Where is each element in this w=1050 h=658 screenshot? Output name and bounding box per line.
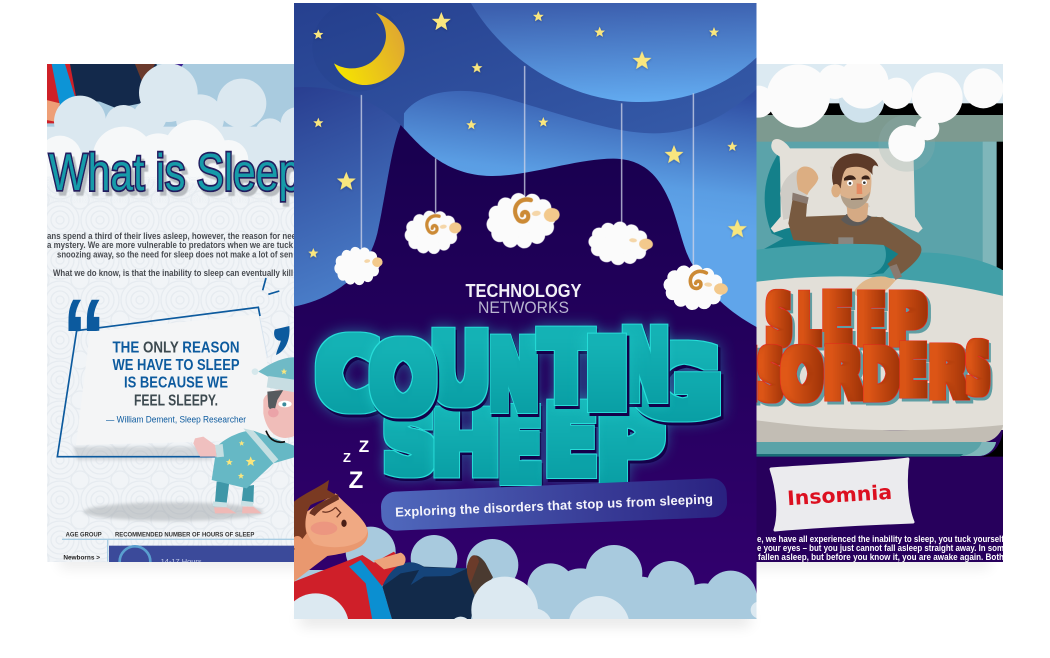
title: Counting: I — [583, 320, 631, 430]
sleep hours table fragment: 14-17 Hours — [161, 558, 202, 565]
intro text: ans spend a third of their lives asleep, however, the reason for nee — [47, 231, 296, 242]
moon — [312, 2, 405, 92]
title: Sleep Disorders: R — [928, 335, 968, 413]
title: Sheep — [383, 386, 664, 503]
subtitle pill: Exploring the disorders that stop us from sleeping — [395, 491, 713, 520]
intro text: a mystery. We are more vulnerable to predators when we are tuck — [47, 240, 294, 251]
cloud band and thought bubble — [756, 64, 1003, 172]
title: Sleep Disorders — [756, 288, 992, 406]
logo: Technology Networks — [466, 281, 582, 317]
bed base — [750, 419, 1004, 457]
quote card — [57, 278, 290, 460]
intro text: snoozing away, so the need for sleep does not make a lot of sen — [57, 250, 293, 260]
title: Counting: N — [620, 311, 670, 421]
title: Counting — [316, 311, 722, 438]
pillow label — [771, 459, 913, 530]
insomnia body text: e your eyes – but you just cannot fall asleep straight away. In som — [757, 543, 1004, 554]
title: Sleep Disorders: E — [856, 283, 886, 360]
arm and hand on blanket — [854, 216, 922, 296]
title: Counting: U — [429, 315, 491, 424]
hanging sheep — [332, 66, 730, 314]
clouds and sleeping man cropped at top of left page — [47, 64, 294, 196]
night sky background — [294, 3, 759, 620]
title: Counting: O — [369, 324, 437, 434]
title: Sheep: E — [544, 386, 598, 496]
panel: Counting Sheep cover (centre page) — [282, 2, 767, 658]
quote text: FEEL SLEEPY. — [134, 393, 218, 410]
sleep hours table fragment — [62, 532, 294, 562]
sleep hours table fragment: RECOMMENDED NUMBER OF HOURS OF SLEEP — [115, 533, 254, 539]
back clouds — [294, 527, 757, 637]
subtitle pill — [380, 478, 728, 531]
title: Sleep Disorders: S — [765, 280, 793, 359]
intro text — [47, 231, 296, 279]
man in bed — [788, 153, 884, 245]
blanket — [750, 244, 1002, 300]
title: Sleep Disorders: I — [741, 335, 759, 414]
insomnia body text — [757, 534, 1005, 563]
stars — [308, 11, 747, 258]
title: Sleep Disorders: E — [821, 279, 853, 358]
insomnia body text: fallen asleep, but before you know it, you are awake again. Both — [758, 552, 1004, 563]
panel shadows — [60, 552, 990, 626]
title: Sleep Disorders: S — [757, 335, 785, 414]
title: Counting: C — [316, 321, 380, 430]
title: Counting: T — [540, 314, 593, 423]
quote text: WE HAVE TO SLEEP — [112, 357, 240, 374]
title: Sheep: P — [596, 391, 664, 500]
title: What is Sleep?: What is Sleep? — [49, 144, 324, 202]
zzz — [343, 437, 369, 494]
zzz: Z — [343, 450, 351, 465]
title: Sleep Disorders: S — [965, 329, 991, 408]
quote text: IS BECAUSE WE — [124, 375, 228, 392]
title: Sheep: H — [431, 394, 501, 493]
title: Sheep: E — [498, 390, 542, 503]
sleeping man — [291, 480, 493, 620]
title: Counting: N — [488, 320, 540, 431]
pillow — [771, 139, 923, 233]
sleepy man in pyjamas — [83, 357, 297, 521]
zzz: Z — [359, 437, 369, 456]
title: Counting: G — [630, 329, 722, 438]
clouds and sleeping man — [282, 480, 767, 658]
heading: Insomnia: Insomnia — [786, 480, 893, 510]
title: Sleep Disorders: L — [797, 281, 821, 359]
logo: Technology Networks: TECHNOLOGY — [466, 281, 582, 301]
panel: What is Sleep (left page) — [47, 64, 294, 562]
intro text: What we do know, is that the inability to sleep can eventually kill — [53, 268, 293, 279]
zzz: Z — [349, 467, 363, 494]
quote text — [106, 340, 246, 424]
title: Sheep: S — [383, 394, 437, 492]
title: Sleep Disorders: D — [862, 336, 900, 414]
mattress — [750, 276, 1003, 430]
insomnia body text: e, we have all experienced the inability to sleep, you tuck yourself — [757, 534, 1005, 545]
bedroom illustration — [750, 64, 1005, 430]
title: Sleep Disorders: E — [898, 333, 928, 411]
title: Sleep Disorders: P — [887, 282, 927, 360]
quote text: THE ONLY REASON — [112, 340, 240, 357]
panel: Sleep Disorders (right page) — [756, 64, 1003, 562]
title: Sleep Disorders: O — [781, 335, 823, 414]
front clouds — [282, 577, 767, 658]
dark teal pillow shadow — [764, 155, 831, 249]
sleep hours table fragment: AGE GROUP — [66, 533, 102, 539]
title: Sleep Disorders: R — [823, 336, 863, 414]
title: Sleep Disorders: D — [706, 335, 744, 414]
quotation mark left: “ — [62, 278, 106, 400]
logo: Technology Networks: NETWORKS — [478, 298, 569, 317]
quote text: — William Dement, Sleep Researcher — [106, 414, 246, 424]
sleep hours table fragment: Newborns > — [63, 555, 101, 561]
